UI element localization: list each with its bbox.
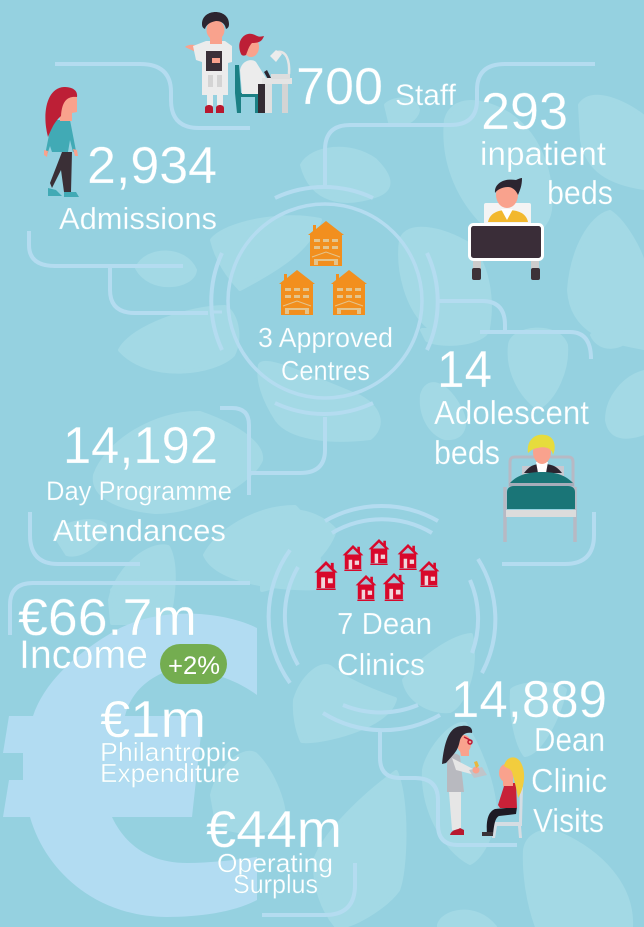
- stat: 2,934 admissions: Admissions: [59, 201, 217, 236]
- stat: operating surplus: €44m: [206, 801, 342, 859]
- stat: income: Income: [19, 633, 148, 677]
- stat: 14,192 day programme attendances: Day Programme: [46, 476, 232, 506]
- stat: 14,192 day programme attendances: 14,192: [63, 417, 218, 475]
- stat: income: €66.7m: [18, 589, 197, 647]
- stat: 293 inpatient beds: 293: [481, 83, 568, 141]
- clinician: [442, 726, 487, 835]
- stat: income: [18, 589, 197, 677]
- stat: 2,934 admissions: 2,934: [87, 137, 217, 195]
- stat: operating surplus: Operating: [217, 848, 333, 878]
- stat: operating surplus: [206, 801, 342, 899]
- label: 7 dean clinics: [337, 606, 432, 682]
- stat: 14,192 day programme attendances: [46, 417, 232, 548]
- stat: 14 adolescent beds: 14: [437, 341, 492, 399]
- stat: 14,889 dean clinic visits: 14,889: [451, 671, 607, 729]
- stat: 14 adolescent beds: beds: [434, 434, 500, 471]
- label: 3 approved centres: 3 Approved: [258, 322, 393, 353]
- stat: 293 inpatient beds: [480, 83, 613, 211]
- stat: 293 inpatient beds: beds: [547, 174, 613, 211]
- icon: orange houses: [279, 221, 367, 315]
- stat: philantropic expenditure: [100, 691, 240, 788]
- label: 7 dean clinics: Clinics: [337, 647, 425, 682]
- icon: walking woman: [44, 87, 79, 197]
- label: 3 approved centres: [258, 322, 393, 386]
- panel: dean clinics ring: [269, 506, 495, 730]
- icon: patient in bed: [470, 178, 542, 280]
- badge: plus 2 percent: [160, 644, 227, 684]
- seated patient: [482, 757, 524, 838]
- icon: clinician and seated patient: [442, 726, 524, 838]
- icon: adolescent in bed: [505, 435, 576, 542]
- icon: red houses: [314, 539, 439, 601]
- stat: 14,889 dean clinic visits: Clinic: [531, 762, 607, 799]
- stat: 700 staff: Staff: [395, 79, 457, 112]
- label: 7 dean clinics: 7 Dean: [337, 606, 432, 641]
- stat: operating surplus: Surplus: [233, 869, 318, 899]
- stat: philantropic expenditure: €1m: [100, 691, 206, 749]
- panel: 3 approved centres ring: [210, 187, 438, 414]
- stat: 2,934 admissions: [59, 137, 217, 236]
- icon: doctor and seated researcher: [185, 12, 292, 113]
- stat: philantropic expenditure: Expenditure: [100, 758, 240, 788]
- badge: plus 2 percent: +2%: [168, 652, 220, 680]
- stat: 14 adolescent beds: Adolescent: [434, 394, 589, 431]
- euro symbol: [3, 614, 257, 917]
- label: 3 approved centres: Centres: [281, 355, 370, 386]
- stat: 14,889 dean clinic visits: [451, 671, 607, 839]
- doctor: [185, 12, 232, 113]
- researcher at desk: [235, 34, 292, 113]
- stat: 14,889 dean clinic visits: Dean: [534, 721, 605, 758]
- stat: 293 inpatient beds: inpatient: [480, 135, 606, 172]
- stat: philantropic expenditure: Philantropic: [100, 737, 240, 767]
- stat: 14,889 dean clinic visits: Visits: [533, 802, 604, 839]
- stat: 700 staff: [296, 58, 457, 116]
- stat: 14 adolescent beds: [434, 341, 589, 471]
- stat: 700 staff: 700: [296, 58, 383, 116]
- stat: 14,192 day programme attendances: Attendances: [53, 513, 226, 548]
